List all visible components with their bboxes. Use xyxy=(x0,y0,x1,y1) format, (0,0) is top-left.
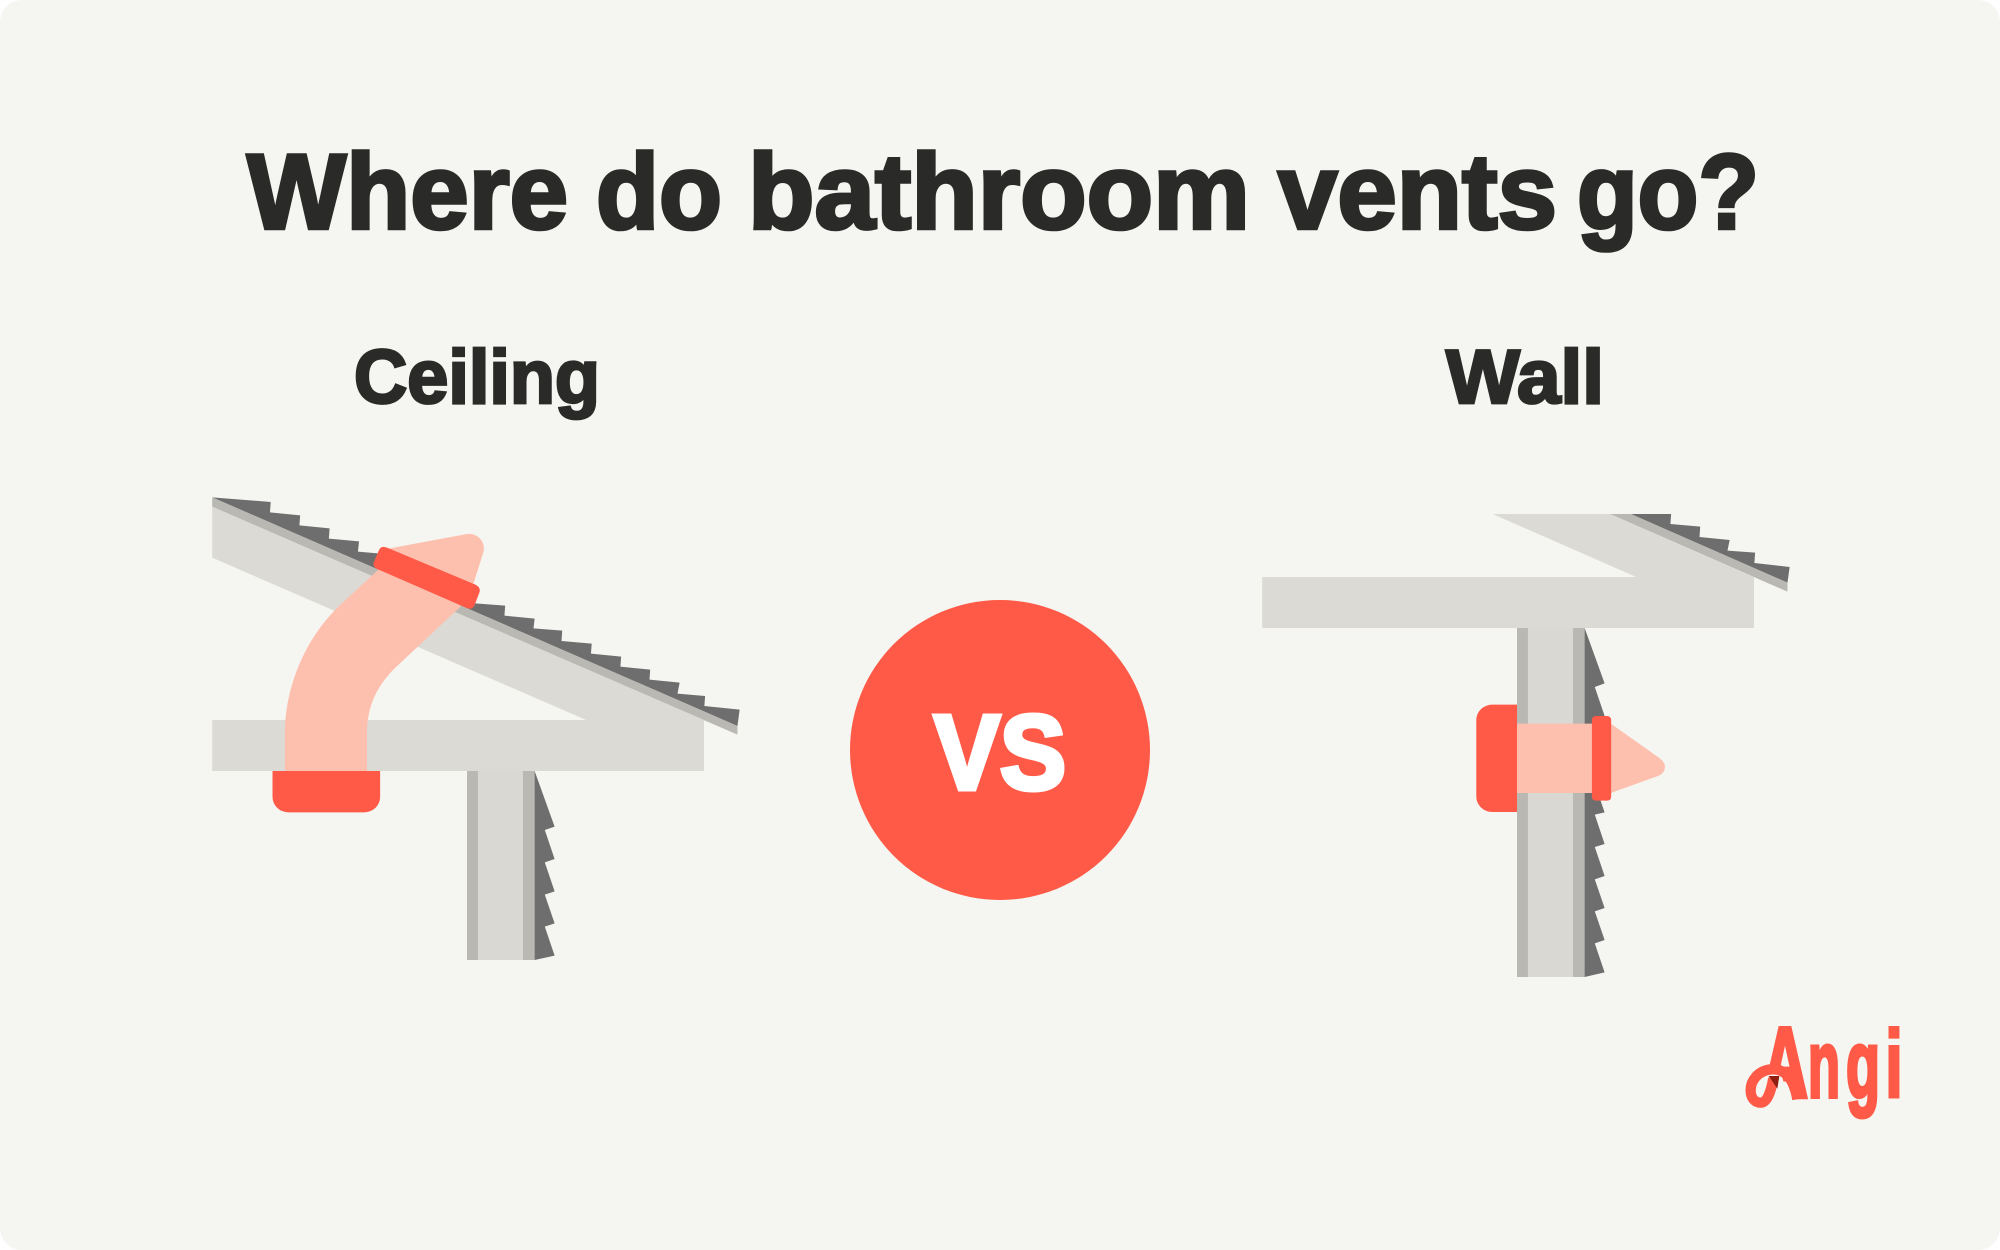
illustration: wall vent xyxy=(1262,514,1790,977)
duct collar xyxy=(1592,716,1611,801)
logo: Angi xyxy=(1751,1007,1903,1119)
interior wall xyxy=(467,771,555,960)
exterior wall xyxy=(1517,628,1605,977)
title xyxy=(247,132,1759,252)
title: do xyxy=(596,132,722,252)
logo loop xyxy=(1751,1065,1797,1103)
wordmark: n xyxy=(1808,1011,1840,1118)
title: bathroom xyxy=(748,132,1250,252)
wordmark: i xyxy=(1885,1011,1903,1118)
wall vent cover xyxy=(1476,705,1517,812)
wordmark xyxy=(1762,1007,1903,1119)
roof underlayer xyxy=(1610,514,1787,592)
vs label: VS xyxy=(934,694,1066,812)
title: Where xyxy=(247,132,568,252)
ceiling vent cover xyxy=(273,771,380,812)
roof underlayer xyxy=(212,497,737,735)
vs badge xyxy=(850,600,1150,900)
heading: ceiling: Ceiling xyxy=(354,335,600,420)
circle xyxy=(850,600,1150,900)
title: go? xyxy=(1577,132,1759,252)
roof and ceiling framing xyxy=(212,507,704,771)
heading: wall: Wall xyxy=(1446,335,1604,420)
roof shingles xyxy=(212,497,740,726)
duct xyxy=(285,534,484,771)
wordmark: A xyxy=(1762,1007,1808,1119)
duct collar xyxy=(374,547,480,609)
roof and ceiling framing xyxy=(1262,514,1754,628)
illustration: ceiling vent xyxy=(212,497,740,960)
wordmark: g xyxy=(1846,1011,1880,1118)
title: vents xyxy=(1278,132,1557,252)
duct xyxy=(1517,724,1665,793)
roof shingles xyxy=(1631,514,1790,583)
